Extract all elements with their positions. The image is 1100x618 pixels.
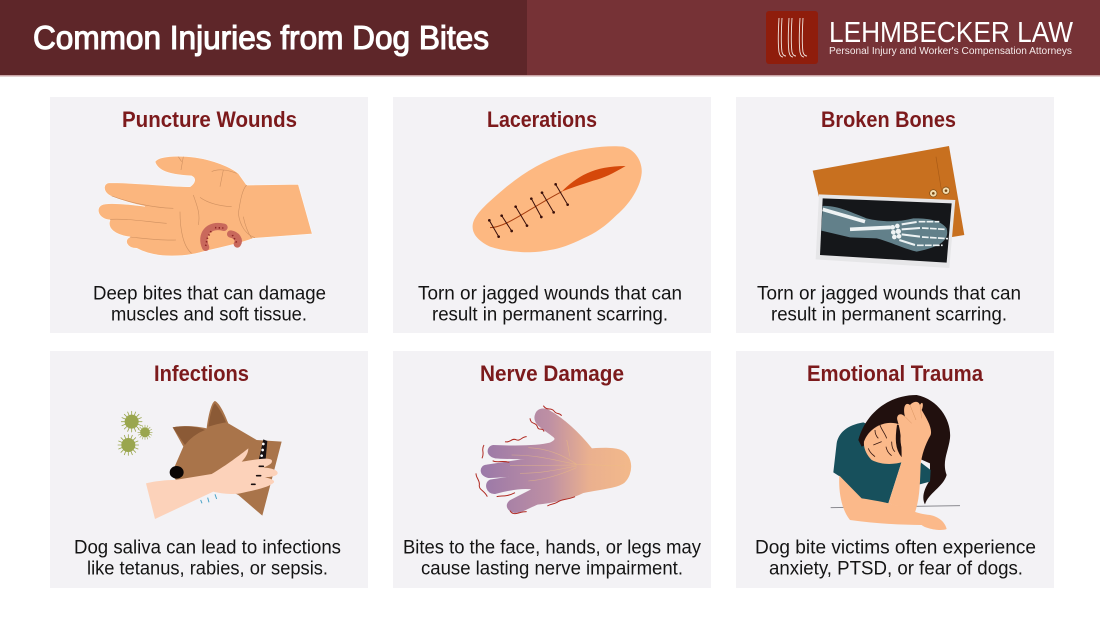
heading: infections: Infections	[154, 361, 249, 386]
heading: nerve damage: Nerve Damage	[480, 361, 624, 386]
description: lacerations: result in permanent scarring.	[432, 304, 668, 326]
description: nerve damage	[403, 538, 701, 580]
panel: infections	[50, 351, 368, 588]
heading: puncture wounds: Puncture Wounds	[122, 107, 297, 132]
logo	[766, 11, 1074, 64]
panel: lacerations	[393, 97, 711, 333]
panel: puncture wounds	[50, 97, 368, 333]
header bar	[0, 0, 1100, 76]
title: Common Injuries from Dog Bites	[33, 19, 489, 56]
description: infections: like tetanus, rabies, or sepsis.	[87, 558, 328, 580]
description: nerve damage: cause lasting nerve impairment.	[421, 558, 683, 580]
description: infections: Dog saliva can lead to infections	[74, 538, 341, 558]
logo: Personal Injury and Worker's Compensation Attorneys	[829, 46, 1072, 57]
icon: bitten hand	[98, 156, 312, 256]
icon: dog bite with germs	[118, 401, 282, 519]
icon: stitched laceration	[473, 146, 642, 252]
heading: lacerations: Lacerations	[487, 107, 597, 132]
description: nerve damage: Bites to the face, hands, or legs may	[403, 538, 701, 558]
logo: LEHMBECKER LAW	[829, 17, 1074, 49]
heading: broken bones: Broken Bones	[821, 107, 956, 132]
description: broken bones: Torn or jagged wounds that can	[757, 284, 1021, 304]
panel: nerve damage	[393, 351, 711, 588]
description: broken bones	[757, 284, 1021, 326]
description: puncture wounds: muscles and soft tissue.	[111, 304, 307, 326]
icon: hand with nerve pain	[476, 406, 630, 514]
description: puncture wounds: Deep bites that can damage	[93, 284, 326, 304]
description: infections	[74, 538, 341, 580]
description: emotional trauma: anxiety, PTSD, or fear of dogs.	[769, 558, 1023, 580]
description: broken bones: result in permanent scarring.	[771, 304, 1007, 326]
heading: emotional trauma: Emotional Trauma	[807, 361, 984, 386]
panel: emotional trauma	[736, 351, 1054, 588]
description: emotional trauma: Dog bite victims often experience	[755, 538, 1036, 558]
description: puncture wounds	[93, 284, 326, 326]
icon: distressed woman	[831, 395, 960, 530]
icon: x-ray and envelope	[813, 146, 964, 268]
panel: broken bones	[736, 97, 1054, 333]
description: lacerations	[418, 284, 682, 326]
description: emotional trauma	[755, 538, 1036, 580]
description: lacerations: Torn or jagged wounds that can	[418, 284, 682, 304]
